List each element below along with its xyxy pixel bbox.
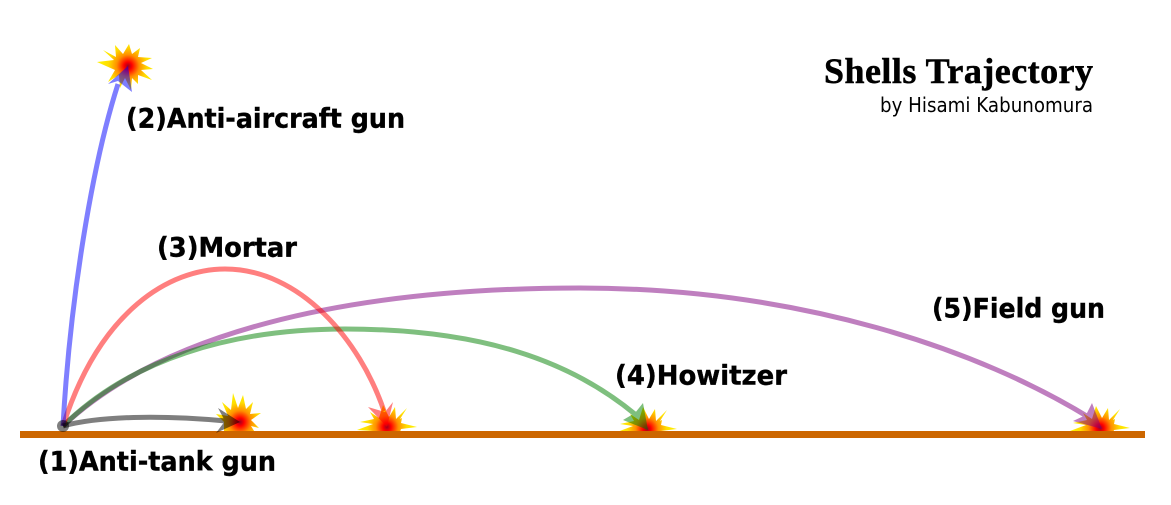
trajectory: anti-aircraft gun <box>63 66 132 426</box>
label: mortar: (3)Mortar <box>157 232 298 264</box>
explosion: field gun <box>1070 406 1130 431</box>
trajectory: anti-tank gun <box>63 408 240 433</box>
title: Shells Trajectory <box>824 51 1093 91</box>
trajectory: field gun <box>63 288 1102 429</box>
label: anti-aircraft gun: (2)Anti-aircraft gun <box>126 104 405 134</box>
explosion: howitzer <box>620 407 677 431</box>
subtitle: author: by Hisami Kabunomura <box>880 93 1093 117</box>
label: anti-tank gun: (1)Anti-tank gun <box>38 446 276 478</box>
trajectory: howitzer <box>63 329 648 430</box>
explosion: mortar <box>357 405 417 431</box>
launch point <box>57 420 69 432</box>
explosion: anti-tank gun <box>216 393 261 434</box>
ground line <box>20 431 1145 438</box>
trajectory: mortar <box>63 269 393 427</box>
label: field gun: (5)Field gun <box>932 294 1105 324</box>
explosion: anti-aircraft gun <box>97 44 153 90</box>
label: howitzer: (4)Howitzer <box>615 360 788 392</box>
